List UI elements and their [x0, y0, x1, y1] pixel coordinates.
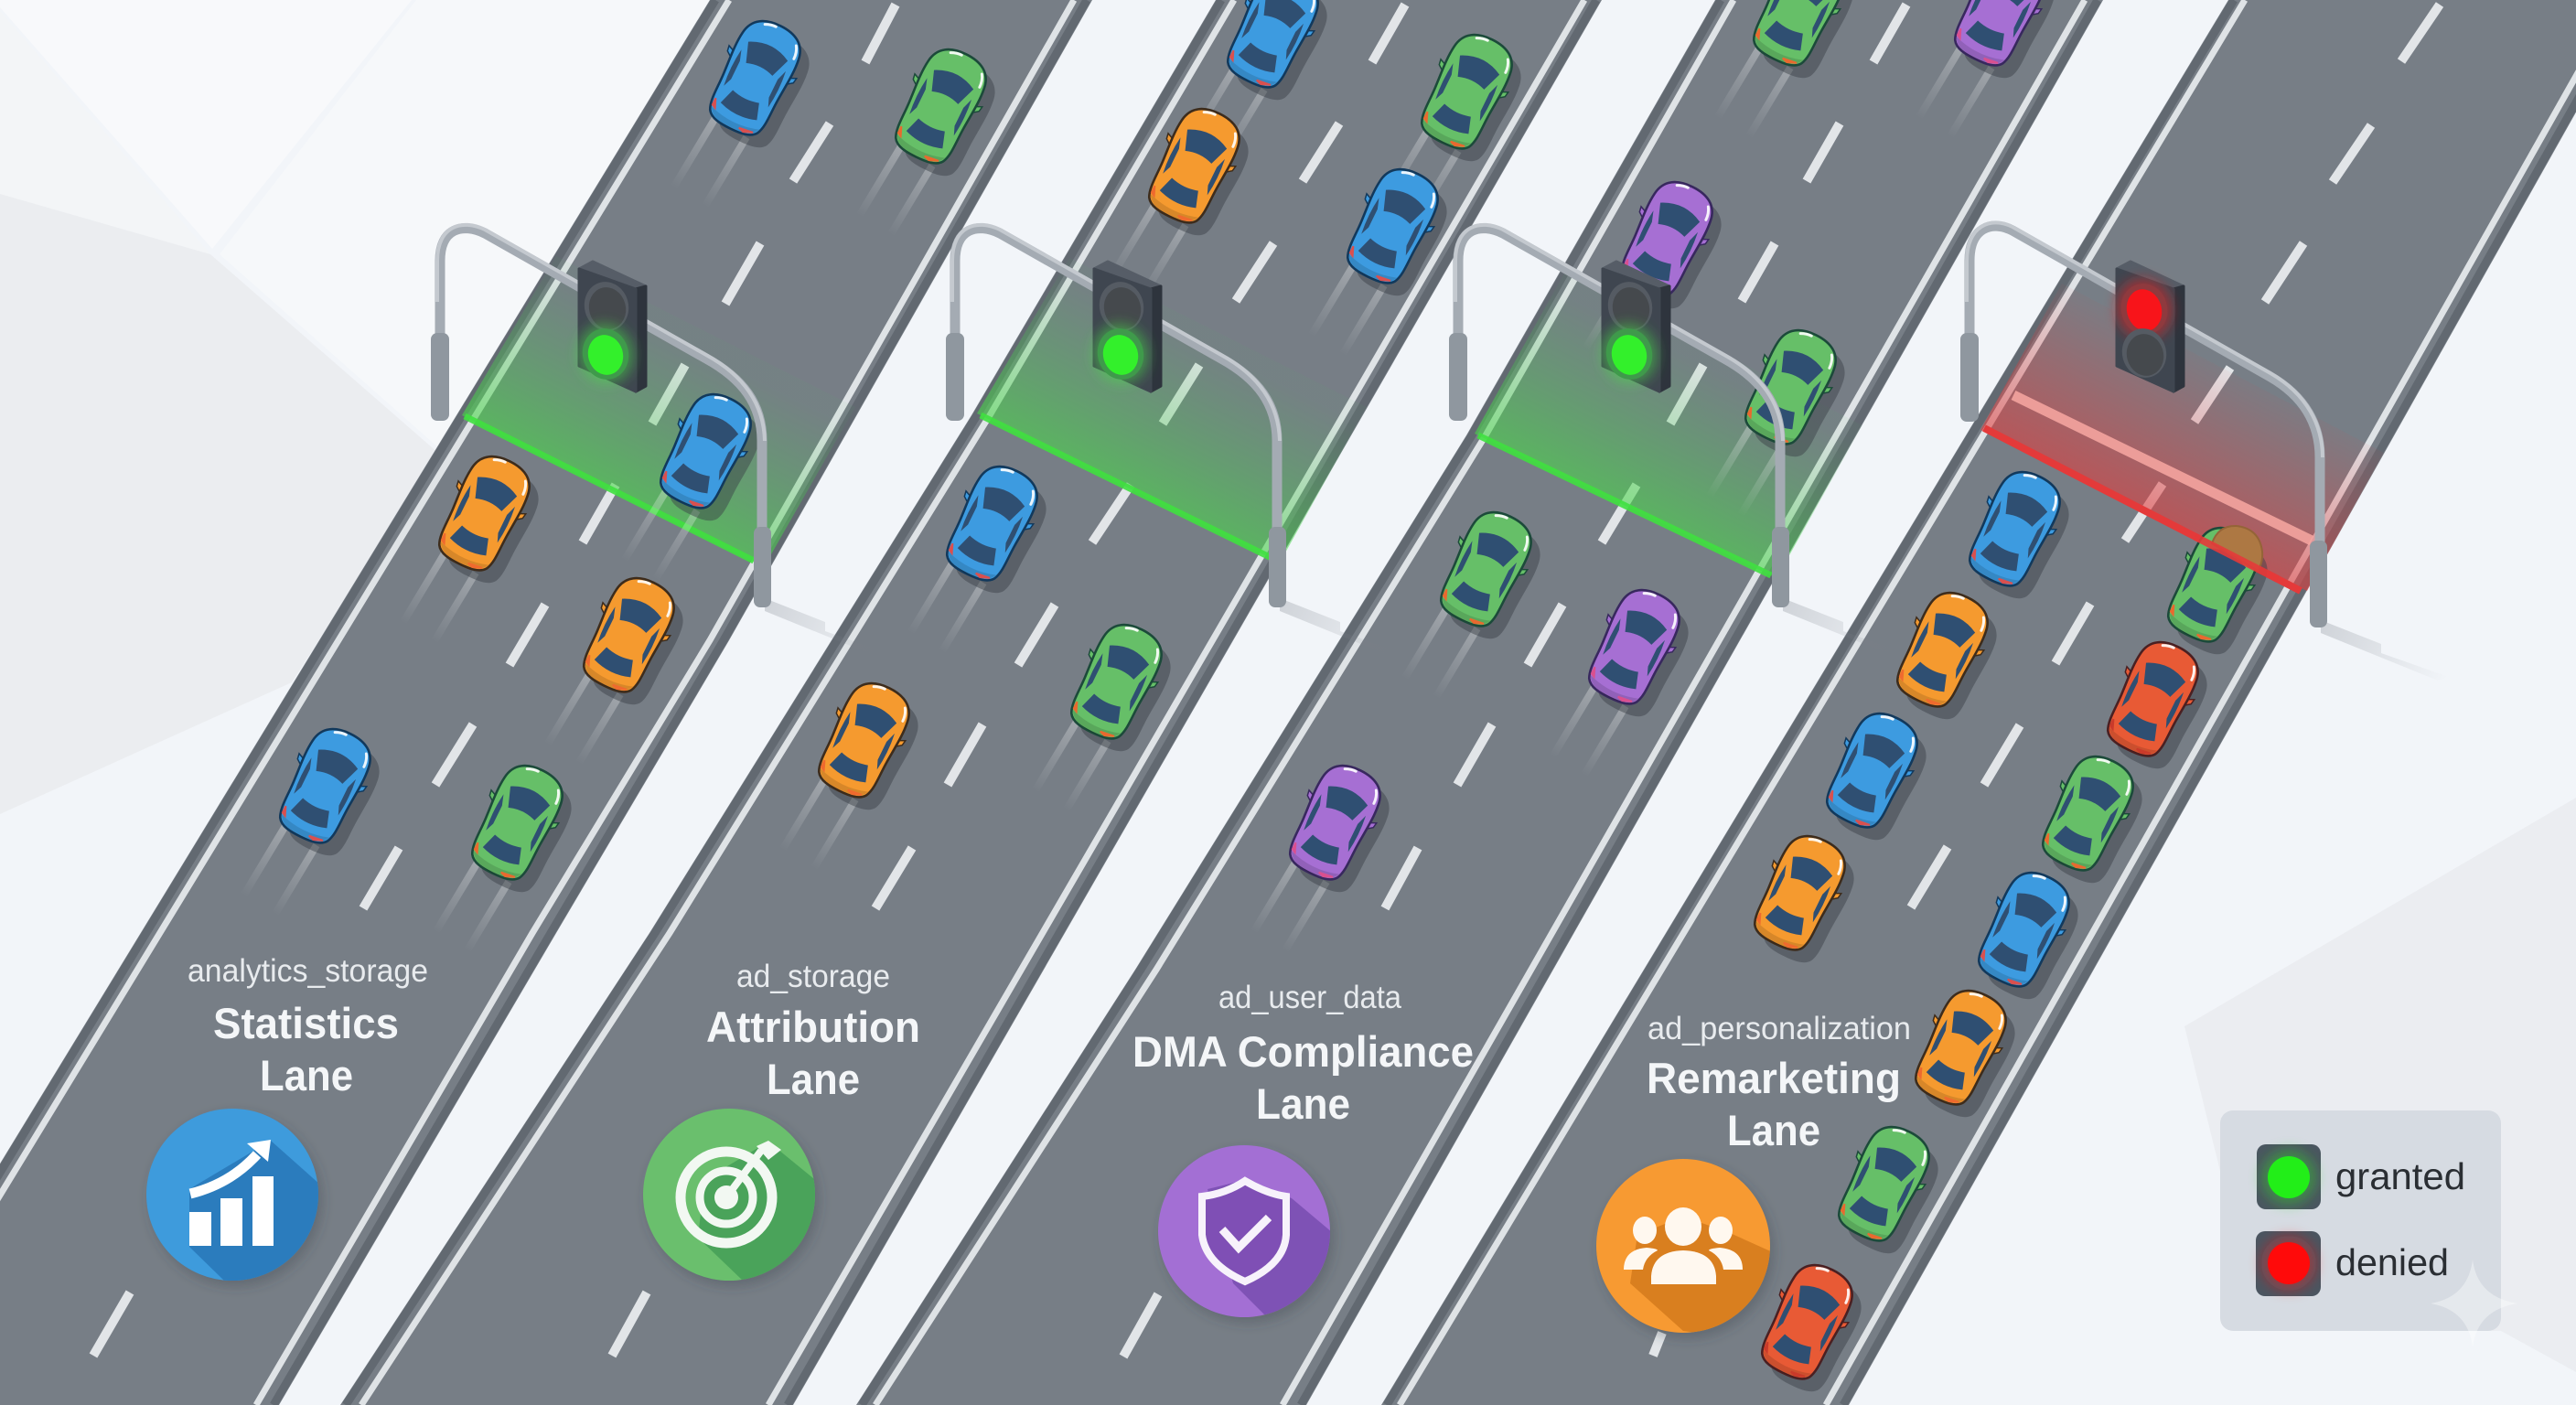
red stop line across stopped car	[2195, 537, 2278, 579]
icon: shield with check	[1158, 1145, 1336, 1325]
car blue	[1962, 861, 2090, 1007]
car green	[1697, 318, 1857, 531]
label: ad_storage	[706, 959, 920, 1103]
car orange	[770, 671, 930, 884]
legend item: granted	[2257, 1144, 2465, 1209]
road: ad_personalization lane	[1381, 0, 2576, 1405]
car blue in zone	[612, 382, 772, 595]
legend	[2220, 1110, 2501, 1331]
car orange	[1881, 581, 2009, 727]
tinted front of stopped car	[2212, 526, 2262, 571]
label: analytics_storage	[188, 953, 428, 1099]
red zone: ad_personalization	[1980, 284, 2384, 591]
road: analytics_storage lane	[0, 0, 1092, 1405]
green zone: ad_storage	[977, 258, 1367, 563]
car green	[1023, 613, 1183, 825]
car green	[1373, 23, 1533, 235]
cars: lane 3	[1241, 0, 2066, 966]
car red	[1745, 1253, 1873, 1400]
label: analytics_storage: analytics_storage	[188, 953, 428, 989]
gantry and red signal: lane 4	[1960, 222, 2327, 627]
road: ad_storage lane	[340, 0, 1602, 1405]
car purple	[1573, 170, 1733, 382]
label: ad_user_data: DMA Compliance	[1132, 1027, 1474, 1076]
car green	[2026, 745, 2154, 891]
car green	[847, 38, 1007, 250]
label: ad_personalization: ad_personalization	[1648, 1011, 1911, 1046]
car blue	[898, 455, 1058, 667]
green zone: ad_user_data	[1475, 272, 1862, 578]
car orange	[1738, 824, 1866, 971]
label: ad_storage: Lane	[767, 1055, 860, 1103]
car blue	[1299, 157, 1459, 370]
car purple	[1540, 578, 1701, 790]
car orange	[1899, 979, 2027, 1125]
car orange	[535, 566, 695, 778]
car orange	[391, 445, 551, 657]
icon: bar chart with arrow	[146, 1109, 329, 1299]
car blue	[1179, 0, 1339, 174]
legend item: denied	[2256, 1231, 2449, 1296]
car green	[1392, 500, 1552, 713]
car green at stop line	[2152, 516, 2280, 662]
label: analytics_storage: Lane	[260, 1051, 353, 1099]
cars: lane 1	[231, 9, 1007, 966]
road: ad_user_data lane	[856, 0, 2103, 1405]
legend item: denied: denied	[2335, 1241, 2449, 1283]
green zone: analytics_storage	[462, 256, 855, 567]
label: ad_user_data	[1132, 980, 1474, 1128]
car blue	[1810, 702, 1938, 848]
gantry and green signal: lane 3	[1449, 225, 1789, 607]
label: ad_user_data: ad_user_data	[1218, 980, 1401, 1015]
sparkle mark	[2431, 1260, 2517, 1347]
gantry ground shadows	[765, 598, 2449, 681]
gantry and green signal: lane 1	[431, 225, 771, 607]
car green	[424, 754, 584, 966]
lane dashes 3	[1123, 5, 1906, 1357]
car red	[2091, 630, 2219, 777]
icon: group of people	[1596, 1159, 1784, 1345]
label: ad_personalization	[1647, 1011, 1911, 1154]
icon: target with arrow	[643, 1109, 823, 1299]
label: ad_personalization: Remarketing	[1647, 1054, 1901, 1102]
label: ad_storage: ad_storage	[736, 959, 890, 994]
car green	[1705, 0, 1865, 152]
cars: lane 4 queue	[1738, 460, 2280, 1400]
gantry and green signal: lane 2	[946, 225, 1286, 607]
car purple	[1241, 754, 1401, 966]
lane dashes 4	[1653, 5, 2440, 1356]
label: ad_user_data: Lane	[1256, 1079, 1350, 1128]
car orange	[1100, 97, 1261, 309]
lane dashes 1	[93, 5, 896, 1356]
car green	[1822, 1115, 1950, 1261]
cars: lane 2	[770, 0, 1533, 884]
car blue	[1953, 460, 2081, 606]
lane dashes 2	[612, 5, 1405, 1356]
legend item: granted: granted	[2335, 1155, 2465, 1197]
label: ad_storage: Attribution	[706, 1003, 920, 1051]
car blue	[661, 9, 821, 221]
car blue	[231, 717, 392, 929]
label: ad_personalization: Lane	[1727, 1106, 1820, 1154]
car purple	[1906, 0, 2066, 152]
label: analytics_storage: Statistics	[213, 999, 399, 1047]
